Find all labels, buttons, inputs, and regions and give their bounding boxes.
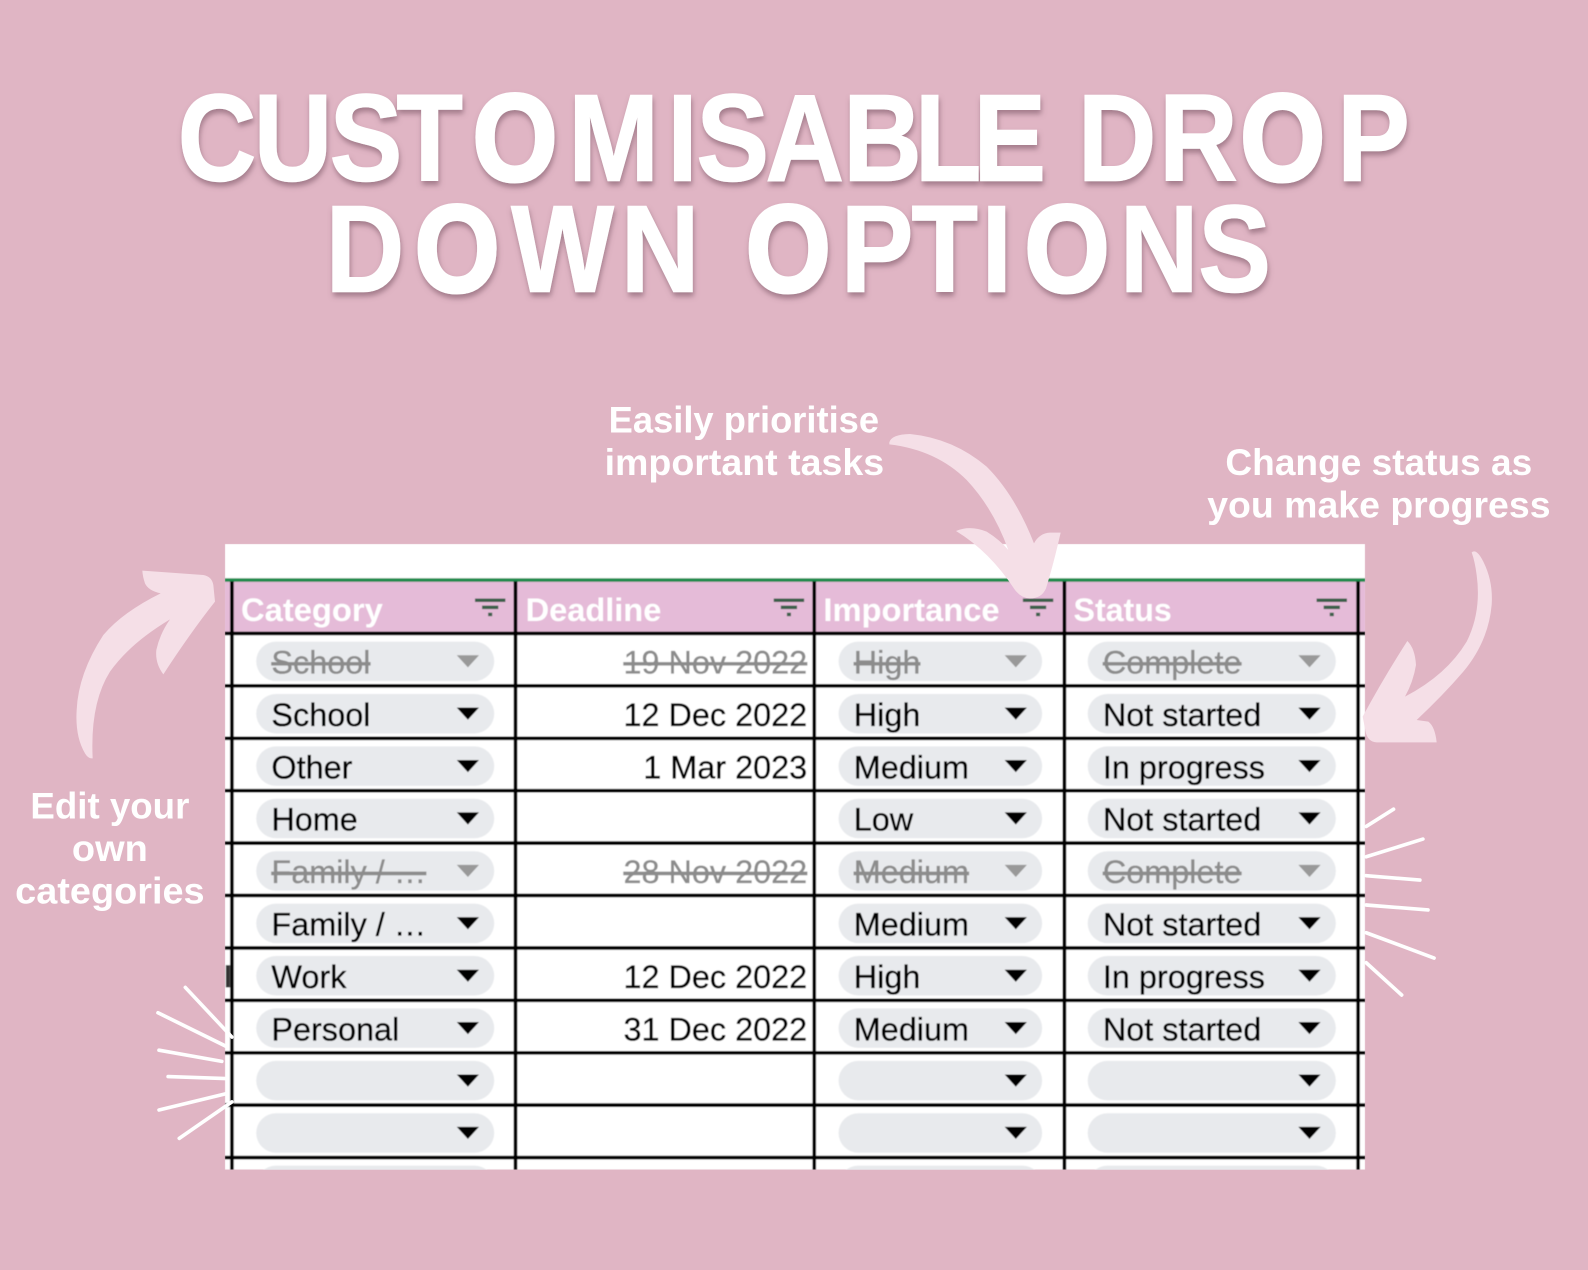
header row: Status	[1074, 592, 1172, 628]
row 4: Not started	[1103, 802, 1261, 838]
row 4	[256, 799, 1336, 838]
row 2: High	[854, 697, 920, 733]
row 2	[256, 694, 1336, 733]
title: DOWN OPTIONS	[326, 180, 1271, 318]
header row: Deadline	[526, 592, 661, 628]
row 8: 31 Dec 2022	[623, 1011, 807, 1047]
callout: edit categories	[15, 784, 205, 911]
row 8	[256, 1008, 1336, 1048]
row 6: Medium	[854, 906, 969, 942]
row 5 completed: Family / …	[271, 854, 426, 890]
row 7: 12 Dec 2022	[623, 959, 807, 995]
row 3	[256, 746, 1336, 786]
empty rows	[256, 1060, 1336, 1170]
row 2: Not started	[1103, 697, 1261, 733]
row 7: Work	[271, 959, 347, 995]
row 1 completed: School	[271, 644, 370, 680]
row 4: Low	[854, 802, 914, 838]
row 6: Family / …	[271, 906, 426, 942]
row 6: Not started	[1103, 906, 1261, 942]
header row	[225, 578, 1365, 632]
row 1 completed: Complete	[1103, 644, 1242, 680]
row 3: In progress	[1103, 749, 1265, 785]
row 7: High	[854, 959, 920, 995]
arrow: to status column	[1363, 551, 1492, 742]
callout: change status: you make progress	[1207, 484, 1551, 526]
callout: change status	[1207, 441, 1551, 526]
row 2: 12 Dec 2022	[623, 697, 807, 733]
row 2: School	[271, 697, 370, 733]
callout: edit categories: Edit your	[30, 784, 190, 826]
row 6	[256, 904, 1336, 943]
spreadsheet table	[225, 544, 1365, 1205]
callout: easily prioritise: Easily prioritise	[609, 398, 879, 440]
title: CUSTOMISABLE DROP	[178, 69, 1410, 207]
row 1 completed: 19 Nov 2022	[623, 644, 807, 680]
title	[178, 69, 1410, 318]
header row: Importance	[823, 592, 1000, 628]
row 4: Home	[271, 802, 358, 838]
row 1 completed: High	[854, 644, 920, 680]
row 8: Not started	[1103, 1011, 1261, 1047]
callout: change status: Change status as	[1225, 441, 1532, 483]
arrow: to category header	[76, 571, 215, 758]
row 8: Medium	[854, 1011, 969, 1047]
row 3: 1 Mar 2023	[643, 749, 807, 785]
arrow: to importance filter	[889, 434, 1061, 598]
callout: edit categories: categories	[15, 869, 205, 911]
grid lines	[225, 581, 1365, 1170]
row 7	[226, 956, 1336, 996]
row 8: Personal	[271, 1011, 399, 1047]
row 5 completed: 28 Nov 2022	[623, 854, 807, 890]
callout: easily prioritise: important tasks	[605, 441, 884, 483]
row 5 completed	[256, 851, 1336, 891]
row 5 completed: Medium	[854, 854, 969, 890]
rays: left burst	[158, 987, 232, 1138]
header row: Category	[241, 592, 383, 628]
rays: right burst	[1366, 809, 1434, 995]
row 3: Medium	[854, 749, 969, 785]
row 1 completed	[256, 642, 1336, 681]
callout: easily prioritise	[605, 398, 884, 483]
row 3: Other	[271, 749, 353, 785]
row 5 completed: Complete	[1103, 854, 1242, 890]
callout: edit categories: own	[72, 827, 148, 869]
row 7: In progress	[1103, 959, 1265, 995]
